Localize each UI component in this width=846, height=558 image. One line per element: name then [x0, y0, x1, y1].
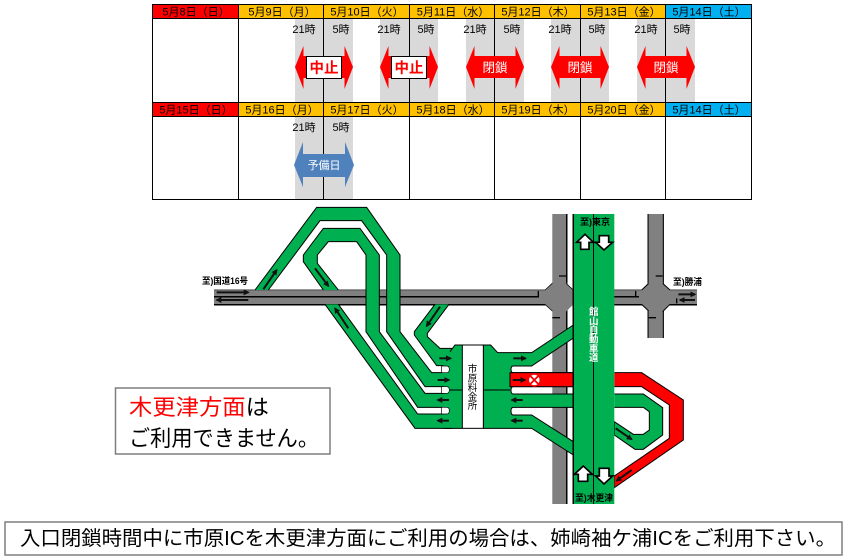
- destination label: Katsuura: 至)勝浦: [673, 276, 702, 287]
- toll gate and ramps east: [442, 325, 683, 488]
- arrow: cancelled 2: 中止: [394, 60, 424, 77]
- closed marker: [528, 374, 540, 386]
- arrow: closure 3: 閉鎖: [653, 61, 679, 75]
- bottom notice: 入口閉鎖時間中に市原ICを木更津方面にご利用の場合は、姉崎袖ケ浦ICをご利用下さい。: [20, 527, 836, 550]
- arrow: closure 2: [551, 46, 609, 89]
- destination label: route 16: 至)国道16号: [202, 275, 248, 286]
- header row 2: 5月14日（土）: [672, 104, 746, 116]
- closed entrance lane: [510, 373, 573, 387]
- header row 1: 5月12日（木）: [501, 6, 575, 18]
- arrow: cancelled 1: 中止: [310, 60, 338, 77]
- time labels: 21時: [548, 23, 572, 36]
- calendar schedule: [152, 4, 752, 200]
- arrow: cancelled 2: [380, 46, 438, 89]
- header row 2: 5月18日（水）: [416, 104, 490, 116]
- direction arrows south: [574, 466, 613, 484]
- notice box: 木更津方面 は: [129, 395, 269, 420]
- time labels: 21時: [292, 121, 316, 134]
- arrow: cancelled 1: [295, 46, 353, 89]
- expressway: [572, 214, 614, 504]
- traffic arrows road east: [678, 294, 695, 300]
- bottom notice: [5, 522, 842, 555]
- toll booth label: 市原料金所: [468, 363, 478, 412]
- time labels: 21時: [377, 23, 401, 36]
- notice box: [116, 388, 330, 454]
- time labels: 21時: [463, 23, 487, 36]
- time labels: 5時: [332, 121, 350, 134]
- header row 2: [159, 104, 746, 116]
- destination label: Kisarazu: 至)木更津: [575, 492, 613, 503]
- destination label: Tokyo: 至)東京: [580, 216, 610, 227]
- header row 1: 5月14日（土）: [672, 6, 746, 18]
- arrow: reserve day: [294, 142, 354, 187]
- direction arrows north: [577, 234, 613, 250]
- notice box: ご利用できません。: [129, 426, 319, 451]
- traffic arrows west: [217, 268, 451, 421]
- toll booth: [462, 345, 483, 428]
- ramps west of toll gate: [255, 207, 452, 428]
- time labels: 21時: [634, 23, 658, 36]
- header row 2: 5月15日（日）: [159, 104, 233, 116]
- time labels: [292, 23, 691, 134]
- arrow: closure 3: [637, 46, 695, 89]
- road map: [202, 207, 702, 504]
- time labels: 5時: [417, 23, 435, 36]
- general roads: [214, 214, 697, 504]
- header row 2: 5月17日（火）: [330, 104, 404, 116]
- time labels: 5時: [588, 23, 606, 36]
- header row 1: 5月9日（月）: [248, 6, 316, 18]
- time labels: 21時: [292, 23, 316, 36]
- time labels: 5時: [332, 23, 350, 36]
- header row 1: 5月11日（水）: [417, 6, 489, 18]
- header row 2: 5月20日（金）: [587, 104, 661, 116]
- arrow: closure 1: [466, 46, 524, 89]
- header row 2: 5月16日（月）: [245, 104, 319, 116]
- time labels: 5時: [673, 23, 691, 36]
- header row 1: 5月10日（火）: [330, 6, 404, 18]
- header row 1: [162, 6, 746, 18]
- header row 1: 5月8日（日）: [162, 6, 230, 18]
- closed red loop ramp: [614, 373, 683, 488]
- arrow: closure 1: 閉鎖: [482, 61, 508, 75]
- traffic arrows east: [512, 358, 632, 481]
- header row 1: 5月13日（金）: [587, 6, 661, 18]
- time labels: 5時: [503, 23, 521, 36]
- arrow: reserve day: 予備日: [308, 159, 340, 172]
- expressway label: 館山自動車道: [589, 307, 599, 364]
- right loop ramp: [614, 394, 663, 449]
- header row 2: 5月19日（木）: [501, 104, 575, 116]
- arrow: closure 2: 閉鎖: [567, 61, 593, 75]
